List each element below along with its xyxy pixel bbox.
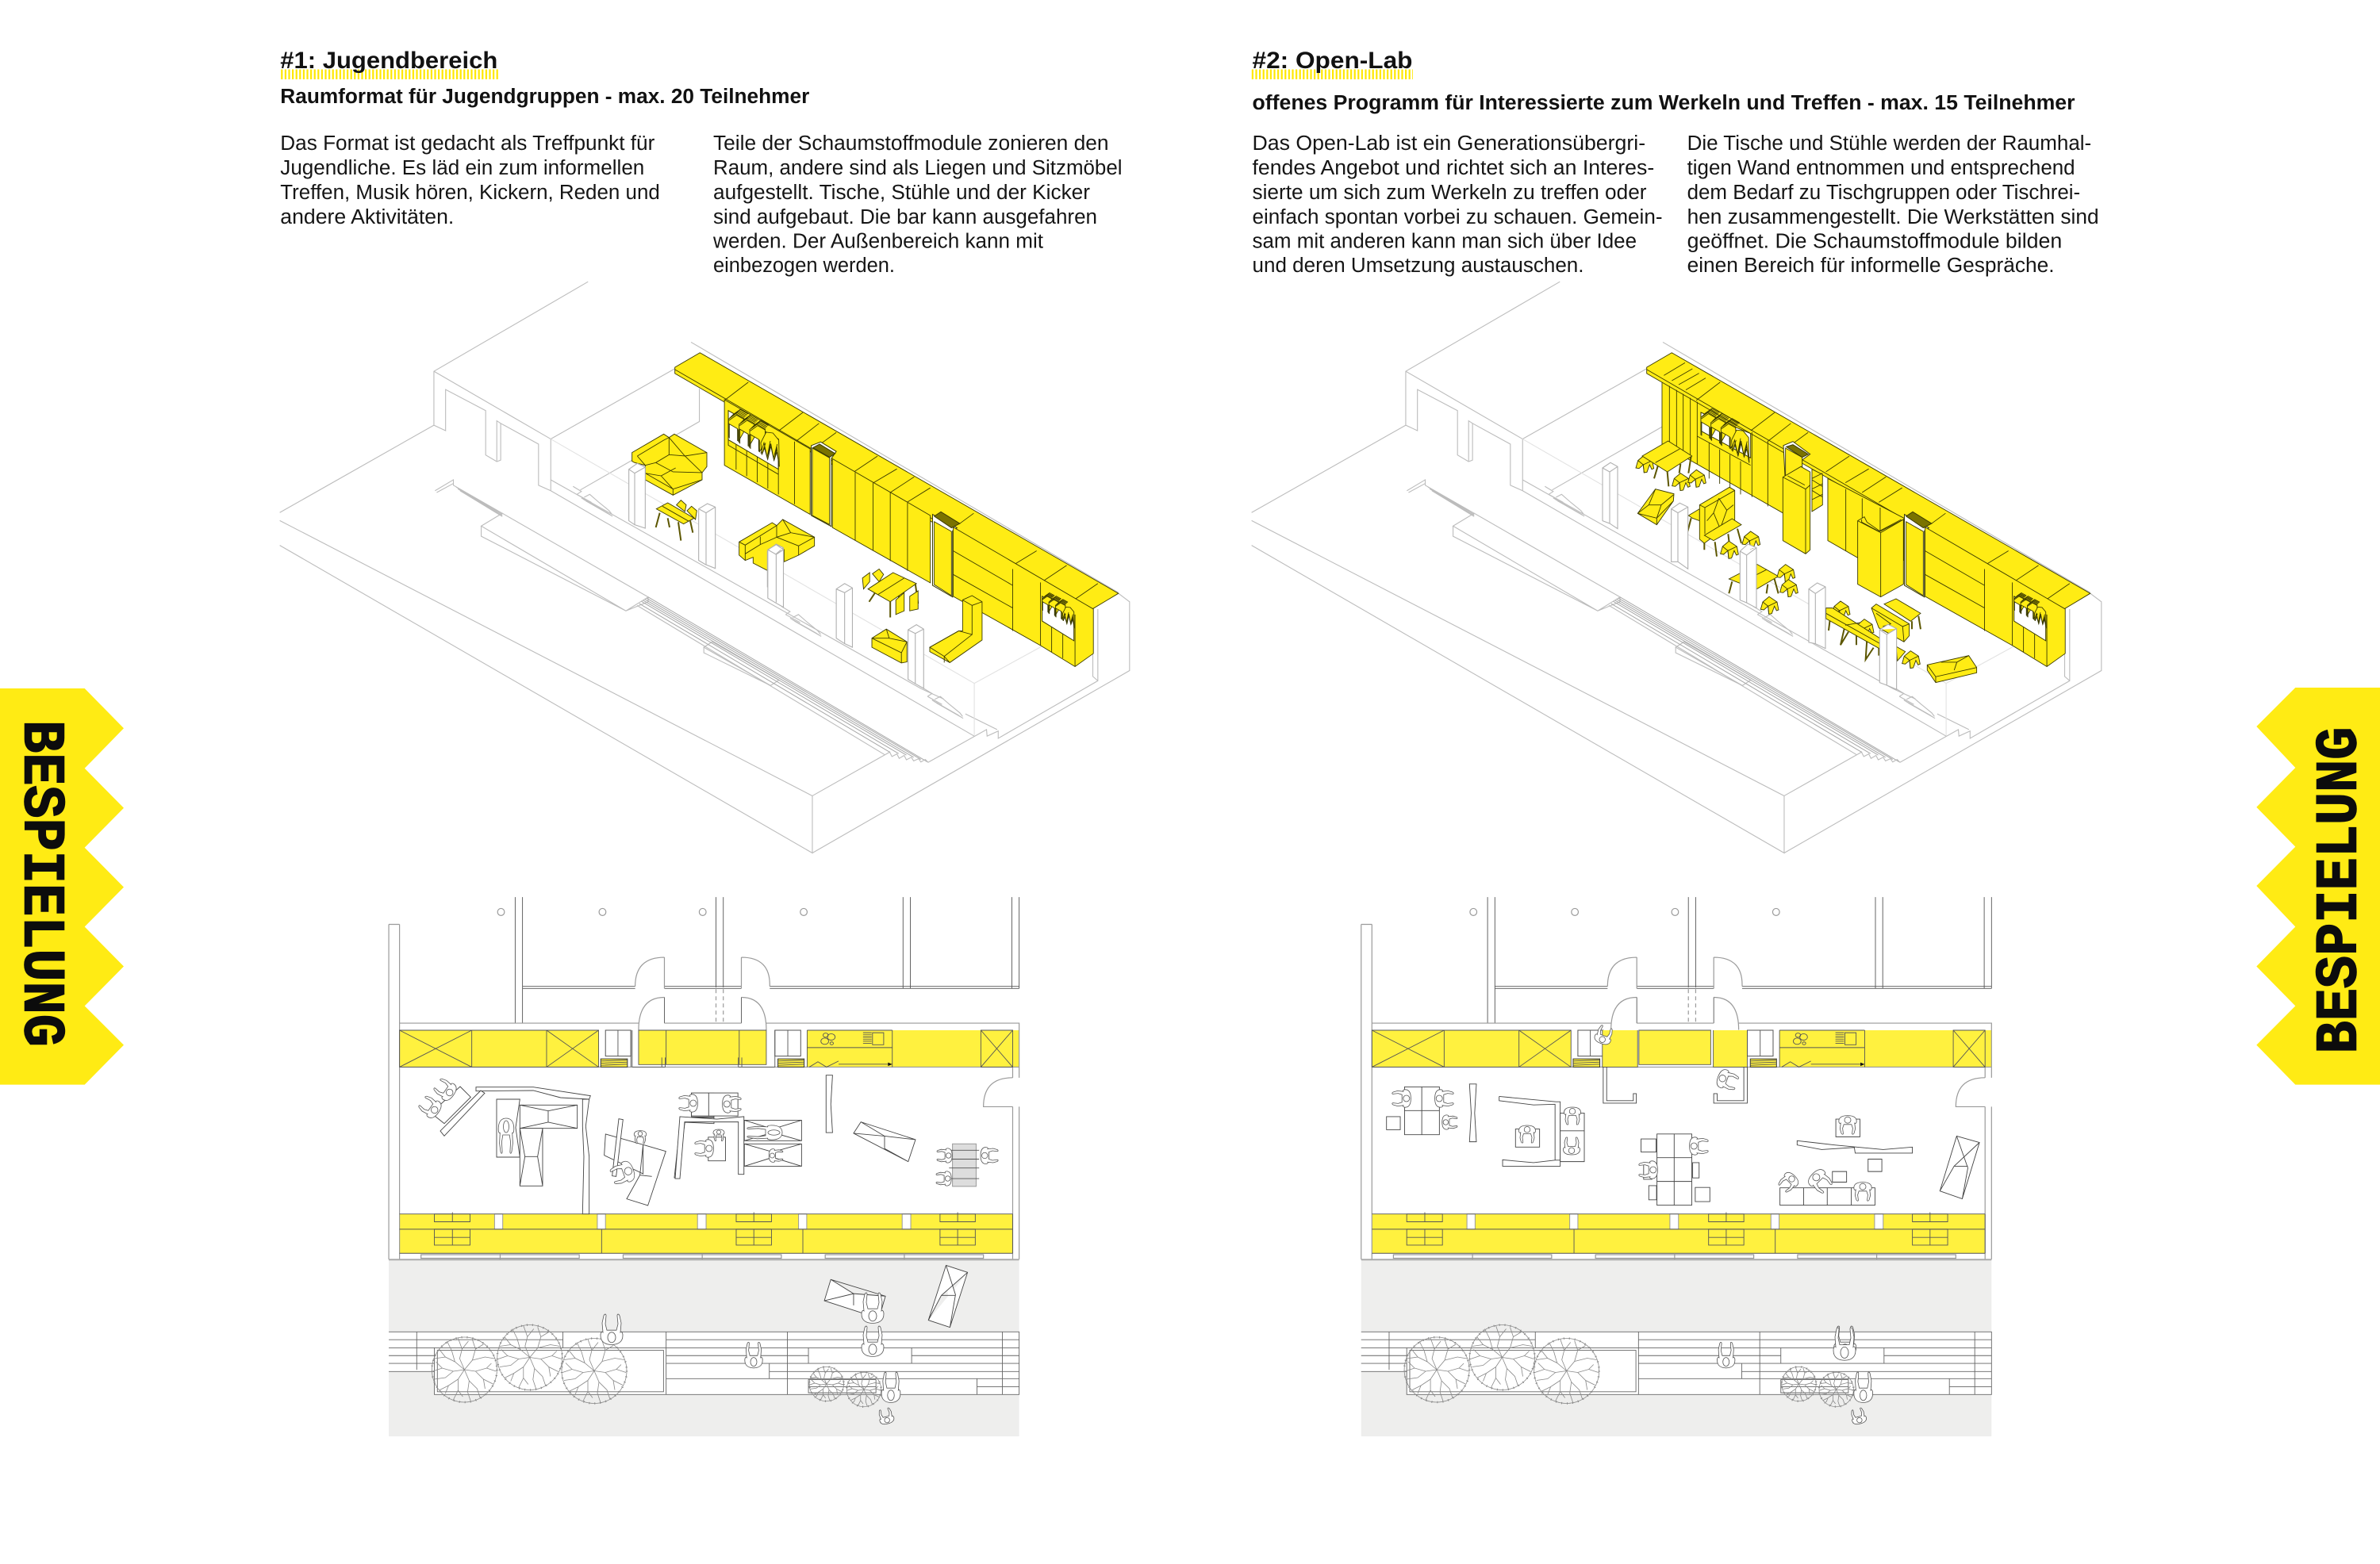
floor plan: Open-Lab <box>1361 897 1991 1436</box>
heading: Jugendbereich: #1: Jugendbereich <box>280 48 497 74</box>
text block: left column: Das Open-Lab ist ein Generationsübergri- <box>1252 132 1645 155</box>
text block: left column: fendes Angebot und richtet sich an Interes- <box>1252 157 1654 179</box>
text block: right column: einen Bereich für informelle Gespräche. <box>1687 255 2055 277</box>
text block: right column: aufgestellt. Tische, Stühle und der Kicker <box>713 182 1091 204</box>
text block: left column: sam mit anderen kann man sich über Idee <box>1252 230 1637 252</box>
panel: Jugendbereich <box>279 48 1130 1436</box>
text block: left column: Jugendliche. Es läd ein zum informellen <box>280 157 644 179</box>
text block: left column <box>1252 132 1663 277</box>
text block: right column <box>712 132 1122 277</box>
text block: right column: Raum, andere sind als Liegen und Sitzmöbel <box>713 157 1122 179</box>
text block: left column: andere Aktivitäten. <box>280 206 454 228</box>
side banner left <box>0 688 124 1085</box>
text block: right column: hen zusammengestellt. Die Werkstätten sind <box>1687 206 2099 228</box>
text block: right column: einbezogen werden. <box>713 255 895 277</box>
text block: left column: und deren Umsetzung austauschen. <box>1252 255 1583 277</box>
subheading: offenes Programm für Interessierte zum Werkeln und Treffen - max. 15 Teilnehmer <box>1252 92 2075 114</box>
text block: right column: Teile der Schaumstoffmodule zonieren den <box>713 132 1109 155</box>
text block: right column: werden. Der Außenbereich kann mit <box>712 230 1043 252</box>
panel: Open-Lab <box>1252 48 2102 1436</box>
text block: left column: Treffen, Musik hören, Kickern, Reden und <box>280 182 660 204</box>
text block: left column: sierte um sich zum Werkeln zu treffen oder <box>1252 182 1647 204</box>
subheading: Raumformat für Jugendgruppen - max. 20 Teilnehmer <box>280 86 809 108</box>
text block: right column: sind aufgebaut. Die bar kann ausgefahren <box>713 206 1097 228</box>
side banner right: BESPIELUNG <box>2307 726 2374 1053</box>
side banner right <box>2256 688 2380 1085</box>
text block: left column: Das Format ist gedacht als Treffpunkt für <box>280 132 655 155</box>
text block: right column: geöffnet. Die Schaumstoffmodule bilden <box>1687 230 2062 252</box>
text block: left column <box>280 132 660 228</box>
text block: right column: Die Tische und Stühle werden der Raumhal- <box>1687 132 2091 155</box>
text block: right column: dem Bedarf zu Tischgruppen oder Tischrei- <box>1687 182 2080 204</box>
isometric drawing: Open-Lab <box>1252 282 2102 853</box>
text block: left column: einfach spontan vorbei zu schauen. Gemein- <box>1252 206 1663 228</box>
isometric drawing: Jugendbereich <box>280 282 1130 853</box>
side banner left: BESPIELUNG <box>7 720 74 1047</box>
floor plan: Jugendbereich <box>389 897 1019 1436</box>
text block: right column: tigen Wand entnommen und entsprechend <box>1687 157 2075 179</box>
heading: Open-Lab: #2: Open-Lab <box>1252 48 1412 74</box>
text block: right column <box>1687 132 2099 277</box>
